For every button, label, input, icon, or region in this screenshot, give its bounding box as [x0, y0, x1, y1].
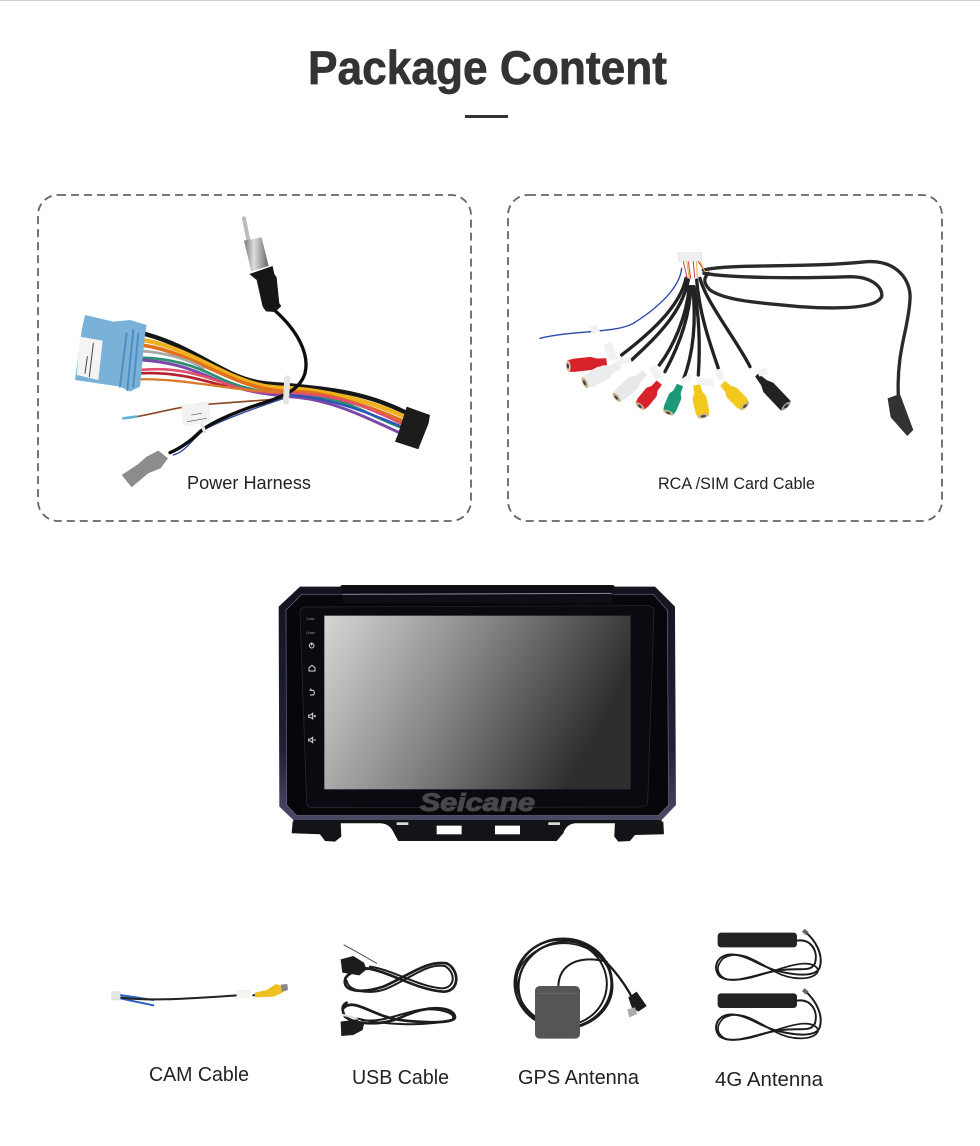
- plug: yellow rca right: [718, 378, 751, 412]
- illustration: rca and sim card cable: [540, 253, 913, 436]
- side touch buttons: [309, 642, 316, 743]
- head unit radio: [279, 585, 676, 842]
- multi pin connector: [678, 253, 702, 261]
- small cable tags: [589, 324, 769, 387]
- illustration: 4g antennas: [716, 929, 821, 1040]
- label: gps antenna: GPS Antenna: [518, 1067, 640, 1089]
- icon: power: [309, 642, 314, 648]
- title underline: [465, 115, 508, 118]
- item: cam cable: [112, 984, 288, 1086]
- gray connector: [122, 451, 168, 487]
- illustration: power harness cable: [75, 218, 430, 487]
- panel: rca sim card cable: [508, 195, 942, 521]
- plug: white rca right: [610, 367, 650, 404]
- plug: yellow rca left: [690, 384, 711, 420]
- plug: white rca left: [579, 358, 623, 390]
- illustration: cam cable: [112, 984, 288, 1005]
- inner glass: [300, 606, 654, 808]
- icon: home: [309, 665, 315, 671]
- blue connector: [75, 315, 147, 392]
- top visor: [342, 586, 613, 603]
- label: power harness: Power Harness: [187, 473, 311, 493]
- plug: black audio jack: [752, 370, 792, 412]
- mic label: [306, 617, 315, 621]
- outer bezel: [279, 585, 676, 820]
- black connector: [395, 407, 430, 449]
- sim connector: [888, 394, 913, 436]
- white label and zip ties: [182, 402, 210, 426]
- screen gradient: [324, 616, 631, 789]
- item: gps antenna: [507, 930, 647, 1089]
- item: 4g antenna: [715, 929, 824, 1091]
- panel: power harness: [38, 195, 471, 521]
- plug: red rca left: [565, 355, 607, 373]
- reset label: [306, 631, 315, 635]
- icon: volume down: [309, 737, 316, 743]
- label: rca sim card cable: RCA /SIM Card Cable: [658, 475, 815, 493]
- antenna plug: [244, 218, 248, 240]
- title: Package Content: [308, 41, 667, 94]
- item: usb cable: [341, 945, 456, 1089]
- icon: volume up: [309, 713, 316, 719]
- illustration: gps antenna: [507, 930, 647, 1039]
- label: usb cable: USB Cable: [352, 1067, 449, 1089]
- plug: red rca right: [633, 378, 664, 412]
- bottom mounting brackets: [292, 818, 664, 842]
- illustration: usb cables: [341, 945, 456, 1036]
- reset label: RST: [310, 631, 315, 635]
- plug: green rca: [661, 382, 686, 417]
- label: cam cable: CAM Cable: [149, 1064, 249, 1086]
- icon: back: [310, 689, 314, 695]
- seicane watermark: Seicane: [420, 790, 535, 817]
- label: 4g antenna: 4G Antenna: [715, 1069, 824, 1091]
- mic label: MIC: [310, 617, 315, 621]
